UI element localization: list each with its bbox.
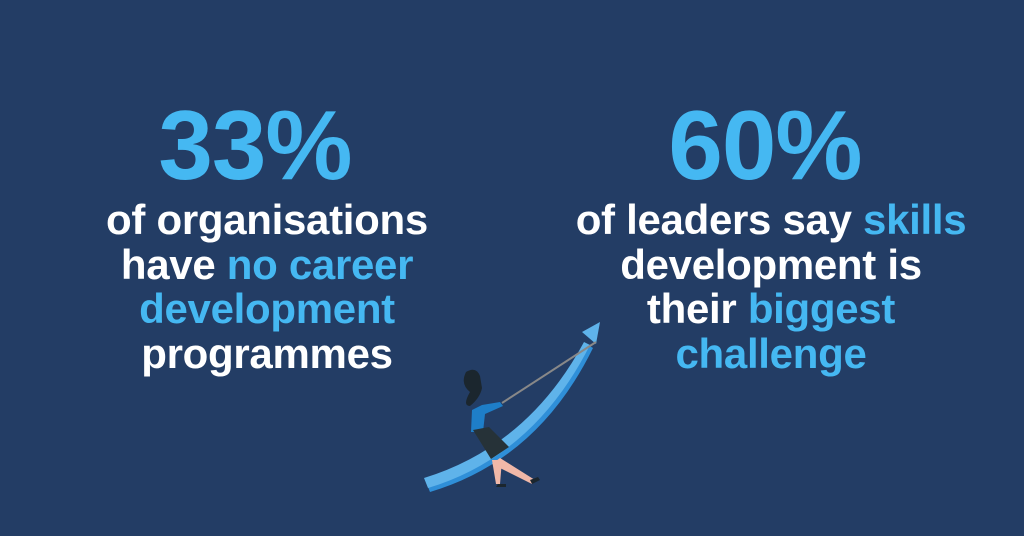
illustration: woman pulling arrow [424,322,600,492]
heading: 60%: 60% [668,90,862,200]
text: right description: of leaders say skills [576,196,966,243]
text: left description: of organisations [106,196,428,243]
rope [502,342,596,403]
text: right description: development is [620,240,922,288]
woman [464,370,540,487]
text: left description [106,196,428,376]
text: right description [576,196,966,376]
text: right description: challenge [675,330,867,376]
panel: right stat [576,90,966,376]
text: right description: their biggest [647,285,895,332]
panel: left stat [106,90,428,376]
heading: 33%: 33% [158,90,352,200]
text: left description: development [139,285,395,332]
text: left description: have no career [121,240,413,288]
text: left description: programmes [141,330,393,376]
arrow curve [424,322,600,492]
